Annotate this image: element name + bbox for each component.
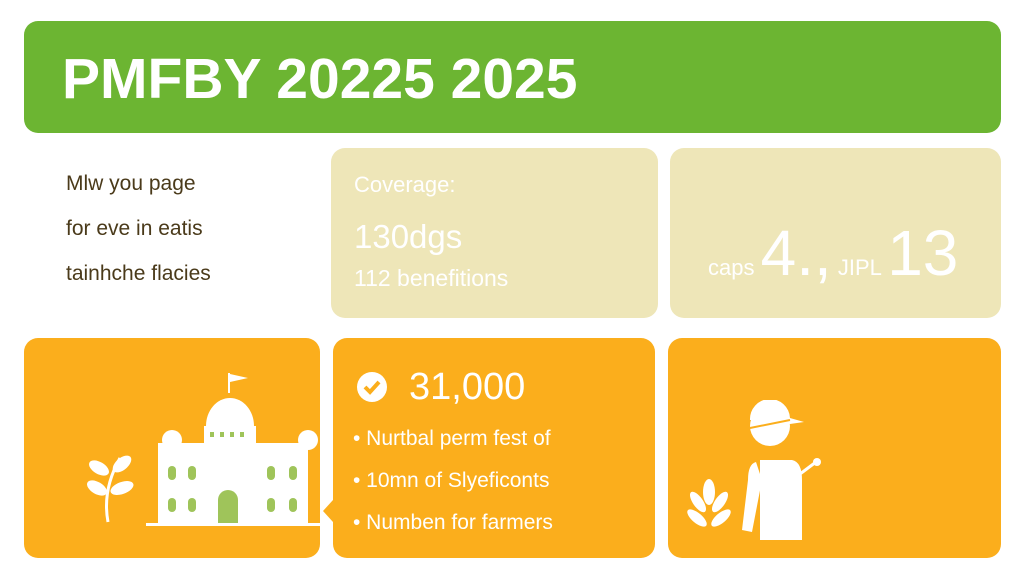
bullet list: • 10mn of Slyeficonts <box>353 469 549 492</box>
intro text <box>66 172 211 285</box>
panel: building <box>24 338 320 558</box>
bullet list <box>353 427 553 534</box>
bullet list: • Numben for farmers <box>353 511 553 534</box>
panel: coverage <box>331 148 658 318</box>
arrow pointer <box>323 500 333 522</box>
coverage value: 130dgs <box>354 218 462 255</box>
stat text: caps 4., JIPL 13 <box>708 217 958 289</box>
panel: caps stat <box>670 148 1001 318</box>
intro text: for eve in eatis <box>66 217 203 240</box>
panel: farmer <box>668 338 1001 558</box>
panel: key numbers <box>333 338 655 558</box>
icon: check <box>357 372 387 402</box>
title: PMFBY 20225 2025 <box>62 47 577 111</box>
icon: wheat <box>687 479 731 527</box>
title banner <box>24 21 1001 133</box>
icon: sprig <box>87 456 134 522</box>
intro text: tainhche flacies <box>66 262 211 285</box>
coverage label: Coverage: <box>354 172 456 197</box>
beneficiaries: 112 benefitions <box>354 265 508 291</box>
headline number: 31,000 <box>409 366 525 408</box>
intro text: Mlw you page <box>66 172 196 195</box>
bullet list: • Nurtbal perm fest of <box>353 427 551 450</box>
icon: building <box>146 373 320 526</box>
icon: farmer <box>742 400 821 540</box>
